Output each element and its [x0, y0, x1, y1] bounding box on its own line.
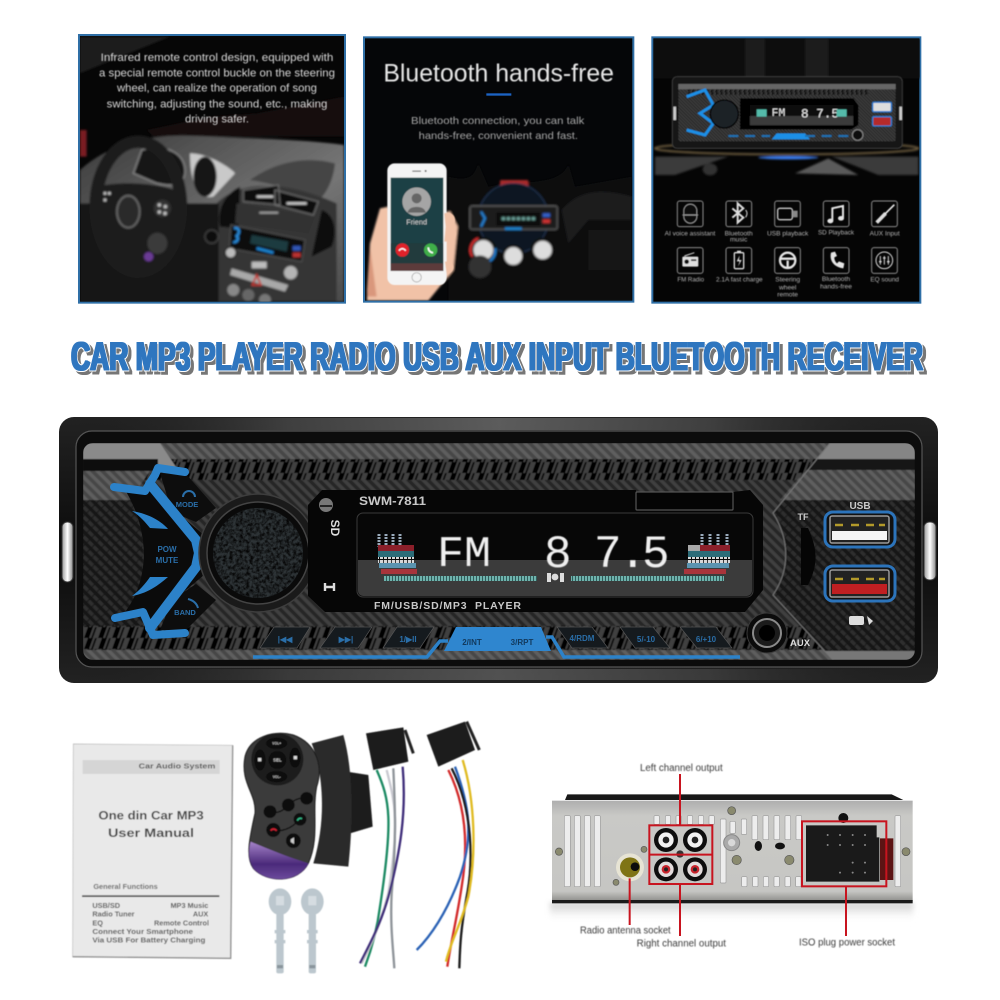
icon: Bluetooth music: Bluetooth: [725, 230, 753, 237]
carbon fibre faceplate: [83, 443, 915, 660]
icon: Steering wheel remote: [775, 248, 800, 299]
user manual: EQ: [92, 918, 103, 927]
text: infrared remote description: [99, 52, 335, 125]
callout labels: [580, 763, 895, 950]
wiring harness left: [360, 727, 413, 968]
key 2: [301, 888, 324, 973]
BAND button: BAND: [174, 608, 196, 617]
TF card slot: TF: [798, 512, 809, 522]
icon: microphone / SD labels: [319, 498, 342, 591]
d-pad: VOL+: [272, 742, 281, 746]
AUX jack: AUX: [790, 638, 811, 649]
screws: [555, 807, 910, 885]
text: infrared remote description: Infrared remote control design, equipped with: [101, 52, 333, 64]
MODE button: MODE: [176, 500, 198, 509]
EQ left: [378, 534, 537, 581]
bezel: [59, 417, 938, 683]
icon: Bluetooth hands-free: Bluetooth: [822, 276, 850, 283]
key 1: [269, 888, 291, 973]
steering wheel remote: [244, 733, 373, 879]
icon: Steering wheel remote: Steering: [775, 277, 800, 284]
blue centre buttons and light line: 2/INT: [462, 638, 482, 647]
icon: microphone / SD labels: SD: [328, 520, 342, 537]
BAND button: [160, 584, 216, 630]
AUX jack: [747, 613, 811, 653]
blue chevron light bar: [114, 468, 199, 635]
model label: SWM-7811: [359, 494, 426, 508]
mini radio product image: FM: [772, 108, 785, 120]
user manual: [73, 744, 233, 958]
POW MUTE label: POW: [157, 545, 177, 554]
photo: dashboard with radio: [367, 163, 632, 301]
icon: smartphone incoming call: Friend: [406, 218, 427, 227]
user manual: Remote Control: [154, 918, 209, 927]
icon: SD Playback: SD Playback: [818, 230, 855, 237]
d-pad: [251, 733, 303, 785]
icon: AUX Input: [870, 201, 900, 237]
icon: EQ sound: EQ sound: [870, 277, 899, 284]
rear connector diagram: [550, 763, 913, 950]
chassis: [552, 801, 913, 901]
wiring harness right: [417, 722, 479, 968]
user manual: AUX: [193, 910, 208, 919]
icon: AUX Input: AUX Input: [870, 230, 900, 237]
background: dark curtain and stage: [653, 38, 920, 175]
icon: SD Playback: [818, 201, 855, 237]
user manual: Radio Tuner: [92, 910, 135, 919]
LCD screen: [357, 513, 753, 597]
player label: FM/USB/SD/MP3 PLAYER: [374, 600, 521, 612]
floor shadow: [550, 903, 913, 923]
icon: 2.1A fast charge: 2.1A fast charge: [716, 277, 763, 284]
button 3: [383, 627, 434, 648]
button 5: 5/-10: [637, 635, 656, 644]
panel: infrared remote control dashboard: [79, 35, 345, 306]
text: infrared remote description: switching, adjusting the sound, etc., making: [107, 98, 327, 110]
USB port: [825, 501, 895, 547]
strap: [347, 772, 373, 833]
icon: Steering wheel remote: wheel: [778, 284, 797, 291]
body: [244, 733, 319, 879]
black button cluster: [125, 490, 210, 620]
icon: Steering wheel remote: remote: [777, 292, 798, 299]
d-pad: SEL: [273, 757, 282, 762]
blue centre buttons and light line: [253, 627, 740, 657]
side clips: [62, 522, 936, 582]
icon: EQ sound: [870, 248, 899, 284]
button 2: [320, 627, 372, 648]
display housing: [308, 490, 763, 612]
user manual: General Functions: [93, 884, 158, 891]
top edge: [565, 794, 903, 800]
icon: AI voice assistant: AI voice assistant: [665, 230, 715, 237]
callout labels: ISO plug power socket: [799, 937, 895, 948]
text: Bluetooth description: [411, 116, 585, 142]
text: infrared remote description: driving safer.: [185, 113, 249, 125]
red callout boxes and leader lines: [630, 774, 886, 936]
accent bar: [486, 93, 511, 96]
remote buttons: [264, 792, 313, 848]
panel: Bluetooth hands-free: [364, 37, 633, 302]
icon: Bluetooth music: music: [730, 236, 748, 243]
user manual: Car Audio System: [139, 762, 216, 771]
badge window: [636, 492, 733, 510]
icon: Bluetooth music: [725, 201, 753, 243]
icon: USB playback: USB playback: [767, 230, 809, 237]
icon: AI voice assistant: [665, 201, 715, 237]
icon: 2.1A fast charge: [716, 248, 763, 284]
charging port: [825, 566, 895, 625]
button 1: [260, 627, 310, 648]
TF card slot: [798, 512, 816, 585]
icon: smartphone incoming call: [387, 163, 456, 285]
callout labels: Radio antenna socket: [580, 926, 671, 937]
user manual: Connect Your Smartphone: [92, 927, 193, 936]
text: Bluetooth description: Bluetooth connection, you can talk: [411, 116, 585, 127]
USB port: USB: [849, 501, 871, 512]
POW MUTE label: MUTE: [156, 556, 179, 565]
preset buttons: [260, 627, 732, 648]
mini radio product image: [672, 77, 902, 148]
button 5: [620, 627, 670, 648]
MODE button: [160, 473, 216, 522]
button 6: 6/+10: [696, 635, 717, 644]
icon: centre indicator: [547, 573, 564, 582]
icon: FM Radio: [677, 248, 704, 284]
photo: car dashboard and steering wheel: [80, 37, 344, 306]
ISO socket: [806, 813, 893, 882]
icon: USB playback: [767, 201, 809, 237]
d-pad: VOL-: [273, 775, 281, 779]
readout: FM: [437, 530, 491, 580]
purple lens: [249, 842, 308, 879]
main car radio front panel: [59, 417, 938, 683]
text: infrared remote description: wheel, can realize the operation of song: [116, 83, 317, 95]
callout labels: Left channel output: [640, 763, 723, 774]
user manual: One din Car MP3: [98, 808, 204, 822]
text: infrared remote description: a special remote control buckle on the steering: [99, 67, 335, 79]
readout: [437, 529, 670, 581]
button 2: ▶▶|: [338, 635, 353, 644]
callout labels: Right channel output: [637, 939, 726, 950]
button 1: |◀◀: [278, 635, 293, 644]
RCA sockets: [654, 828, 707, 881]
button 6: [680, 627, 732, 648]
button 4: [557, 627, 608, 648]
mini radio product image: 8 7.5: [801, 106, 839, 121]
heading: Bluetooth hands-free: Bluetooth hands-free: [383, 61, 614, 88]
readout: 87.5: [544, 529, 670, 581]
antenna socket: [616, 853, 644, 881]
feature icon grid: [665, 201, 900, 299]
vents: [564, 816, 901, 887]
button 4: 4/RDM: [570, 634, 595, 643]
text: Bluetooth description: hands-free, convenient and fast.: [419, 131, 578, 142]
blue crescents: [132, 511, 168, 596]
EQ right: [571, 534, 730, 581]
user manual: Via USB For Battery Charging: [92, 936, 205, 945]
user manual: MP3 Music: [170, 901, 208, 910]
mounting keys: [269, 888, 324, 973]
icon: Bluetooth hands-free: [820, 248, 852, 291]
icon: FM Radio: FM Radio: [677, 277, 704, 284]
button 3: 1/▶II: [399, 635, 417, 644]
icon: Bluetooth hands-free: hands-free: [820, 284, 852, 291]
POW MUTE label: [156, 545, 179, 565]
user manual: USB/SD: [92, 901, 120, 910]
panel: product and feature icons: [652, 37, 920, 303]
volume knob: [199, 494, 317, 612]
blue centre buttons and light line: 3/RPT: [511, 638, 533, 647]
user manual: User Manual: [108, 826, 194, 840]
